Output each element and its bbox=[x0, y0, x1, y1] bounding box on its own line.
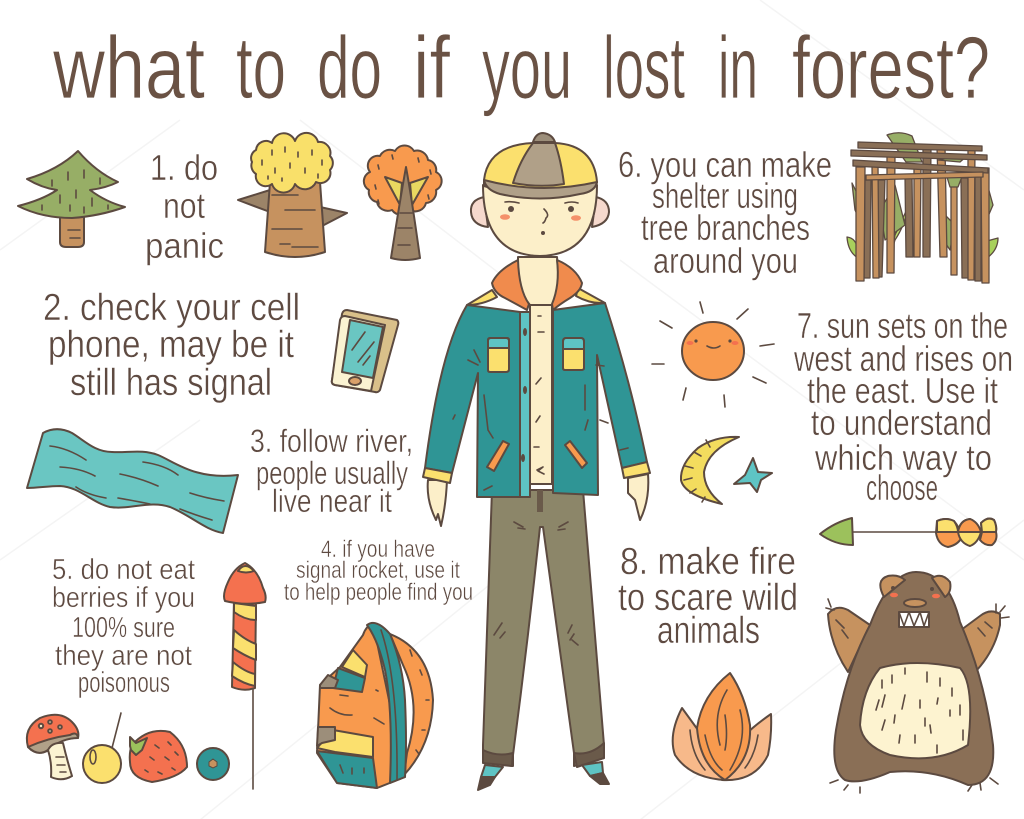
trouser cuffs bbox=[483, 743, 604, 767]
step 1 text: not bbox=[163, 185, 205, 226]
icon: yellow tree with thick trunk bbox=[238, 133, 347, 257]
title: in bbox=[718, 18, 758, 117]
hood bbox=[492, 260, 582, 310]
bear ears bbox=[880, 576, 950, 597]
step 6 text: shelter using bbox=[652, 175, 798, 216]
title: to bbox=[236, 18, 286, 117]
undershirt bbox=[530, 305, 552, 484]
jacket bbox=[423, 288, 650, 497]
icon: river bbox=[27, 429, 238, 533]
icon: cell phone bbox=[332, 310, 398, 392]
icon: star bbox=[734, 458, 772, 492]
step 8 text: 8. make fire bbox=[620, 541, 796, 583]
icon: strawberry bbox=[130, 731, 187, 782]
step 7 text: which way to bbox=[814, 437, 992, 478]
neck bbox=[518, 257, 560, 305]
hands bbox=[428, 474, 648, 526]
step 2 text: still has signal bbox=[70, 362, 272, 404]
step 6 text: 6. you can make bbox=[618, 144, 832, 185]
title: you bbox=[482, 18, 572, 117]
icon: blueberry bbox=[197, 748, 229, 780]
step 6 text bbox=[618, 144, 832, 281]
head and face bbox=[483, 185, 597, 256]
shelter rails bbox=[851, 142, 988, 180]
shelter leaves behind bbox=[847, 183, 998, 258]
step 2 text: phone, may be it bbox=[48, 324, 294, 366]
step 5 text bbox=[52, 554, 195, 699]
step 5 text: poisonous bbox=[78, 667, 170, 699]
icon: campfire bbox=[673, 673, 771, 780]
step 3 text: 3. follow river, bbox=[250, 423, 413, 459]
character: boy in jacket bbox=[423, 133, 650, 790]
step 4 text: signal rocket, use it bbox=[296, 557, 460, 584]
step 8 text bbox=[618, 541, 798, 652]
title: lost bbox=[603, 18, 685, 117]
step 6 text: tree branches bbox=[641, 207, 810, 248]
title: if bbox=[413, 18, 450, 117]
shelter roof leaves bbox=[887, 133, 968, 187]
step 5 text: they are not bbox=[55, 640, 192, 672]
icon: crescent moon bbox=[681, 437, 739, 504]
icon: backpack bbox=[317, 623, 433, 788]
icon: mushroom bbox=[27, 715, 78, 779]
step 3 text: people usually bbox=[256, 455, 408, 491]
step 4 text: 4. if you have bbox=[321, 536, 435, 563]
bear arms bbox=[826, 599, 1009, 793]
icon: orange tree bbox=[364, 146, 442, 260]
socks and shoes bbox=[478, 762, 609, 790]
trousers bbox=[483, 490, 604, 766]
step 8 text: animals bbox=[657, 610, 760, 652]
step 8 text: to scare wild bbox=[618, 577, 798, 619]
icon: yellow cherry bbox=[83, 713, 121, 783]
icon: branch shelter bbox=[847, 133, 998, 283]
shelter posts bbox=[856, 147, 989, 283]
step 6 text: around you bbox=[653, 240, 798, 281]
cap bbox=[484, 133, 597, 198]
step 4 text bbox=[284, 536, 473, 606]
step 4 text: to help people find you bbox=[284, 579, 473, 606]
step 2 text bbox=[43, 287, 300, 404]
step 1 text: panic bbox=[145, 225, 224, 266]
step 5 text: 5. do not eat bbox=[52, 554, 195, 586]
icon: smiling sun bbox=[652, 302, 774, 407]
icon: green pine tree bbox=[18, 151, 125, 247]
belt strap bbox=[537, 490, 543, 512]
step 3 text bbox=[250, 423, 413, 519]
step 2 text: 2. check your cell bbox=[43, 287, 300, 329]
title: what bbox=[52, 18, 205, 117]
step 3 text: live near it bbox=[272, 483, 392, 519]
step 1 text: 1. do bbox=[150, 147, 218, 188]
title: do bbox=[317, 18, 382, 117]
icon: bear bbox=[826, 572, 1009, 793]
step 5 text: 100% sure bbox=[72, 612, 175, 644]
ears bbox=[471, 197, 609, 227]
icon: arrow bbox=[820, 518, 996, 547]
step 7 text bbox=[793, 305, 1013, 508]
title bbox=[52, 18, 990, 117]
icon: signal rocket bbox=[224, 563, 266, 789]
step 1 text bbox=[145, 147, 224, 266]
step 7 text: choose bbox=[866, 467, 938, 508]
step 5 text: berries if you bbox=[52, 582, 195, 614]
